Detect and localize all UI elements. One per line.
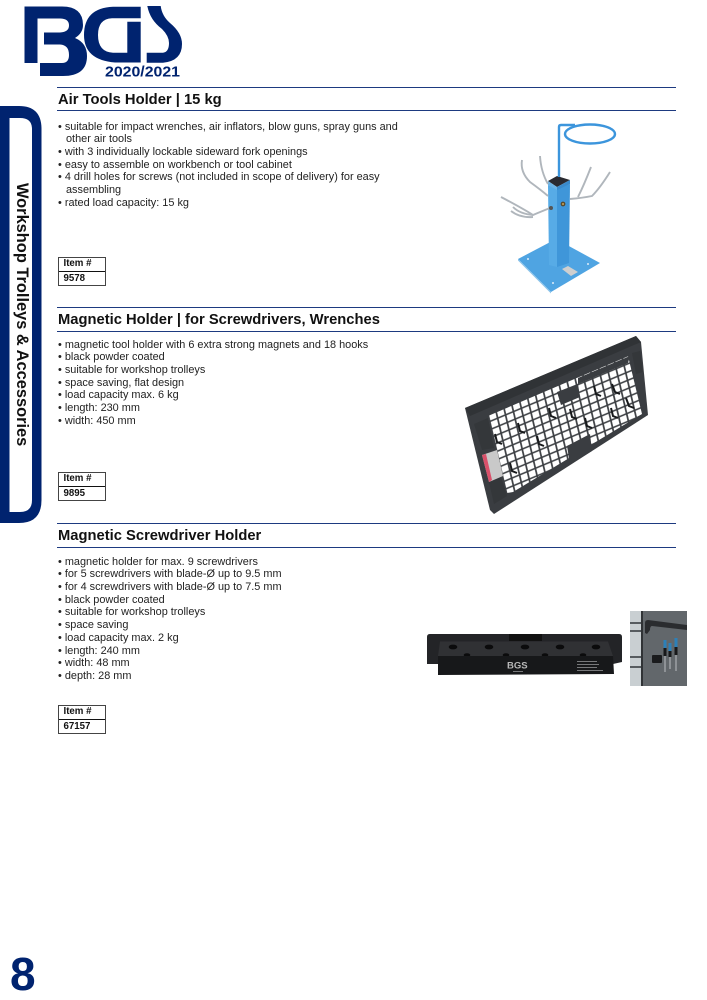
feature list: • magnetic holder for max. 9 screwdrivers [58,556,258,568]
item number box [58,472,106,501]
feature list [58,338,368,427]
item number box [58,257,106,286]
item number box: Item # [64,258,92,269]
side tab: chapter label: Workshop Trolleys & Accessories [13,183,31,446]
feature list: • space saving [58,619,128,631]
feature list: • space saving, flat design [58,377,184,389]
heading: Air Tools Holder | 15 kg [58,92,222,108]
column [548,185,557,267]
feature list: • 4 drill holes for screws (not included in scope of delivery) for easy [58,171,380,183]
top face with holes [438,642,613,656]
feature list: • depth: 28 mm [58,670,131,682]
product image: holder in use on trolley [630,611,687,686]
section 2: Magnetic Holder [57,307,676,501]
product image: screwdriver holder tray [427,634,622,675]
feature list [58,120,398,209]
solid pads [557,384,580,405]
item number box: 9578 [64,272,85,284]
hooks [495,384,634,473]
item number box [58,705,106,734]
item number box: 67157 [64,720,90,732]
feature list: • length: 240 mm [58,645,140,657]
feature list: • easy to assemble on workbench or tool cabinet [58,159,292,171]
feature list: • length: 230 mm [58,402,140,414]
label [562,266,578,276]
item number box: 9895 [64,488,85,498]
fork arms [501,156,610,217]
year: 2020/2021 [105,64,181,81]
section 1: Air Tools Holder [57,87,676,286]
feature list: • load capacity max. 2 kg [58,632,179,644]
feature list: • black powder coated [58,351,165,363]
product image: air tools holder stand [500,123,616,294]
heading: Magnetic Holder | for Screwdrivers, Wrenches [58,312,380,328]
front face [438,656,614,675]
feature list: assembling [66,184,121,196]
feature list: • width: 48 mm [58,657,130,669]
feature list: • suitable for workshop trolleys [58,364,205,376]
feature list: • for 5 screwdrivers with blade-Ø up to 9.5 mm [58,568,282,580]
sticker [482,450,503,482]
back flange [427,634,622,664]
feature list: other air tools [66,133,132,145]
feature list: • black powder coated [58,594,165,606]
logo letters [24,6,182,76]
item number box: Item # [64,706,92,717]
product image: magnetic perforated holder [465,336,648,514]
perforated grid [488,356,642,493]
feature list: • rated load capacity: 15 kg [58,197,189,209]
feature list: • for 4 screwdrivers with blade-Ø up to 7.5 mm [58,581,282,593]
base plate [518,239,600,292]
page number: 8 [10,948,36,1000]
tray branding: BGS [507,660,528,672]
feature list: • with 3 individually lockable sideward fork openings [58,146,308,158]
section 3: Magnetic Screwdriver Holder [57,523,676,734]
feature list: • load capacity max. 6 kg [58,389,179,401]
plate [465,336,648,514]
heading: Magnetic Screwdriver Holder [58,528,261,544]
feature list: • magnetic tool holder with 6 extra strong magnets and 18 hooks [58,338,368,350]
ring and rod [559,124,615,177]
feature list: • suitable for workshop trolleys [58,606,205,618]
BGS logo with year [24,6,182,81]
item number box: Item # [64,473,92,484]
side tab: chapter label [0,106,42,523]
feature list: • width: 450 mm [58,415,136,427]
feature list [58,556,282,682]
feature list: • suitable for impact wrenches, air inflators, blow guns, spray guns and [58,120,398,132]
